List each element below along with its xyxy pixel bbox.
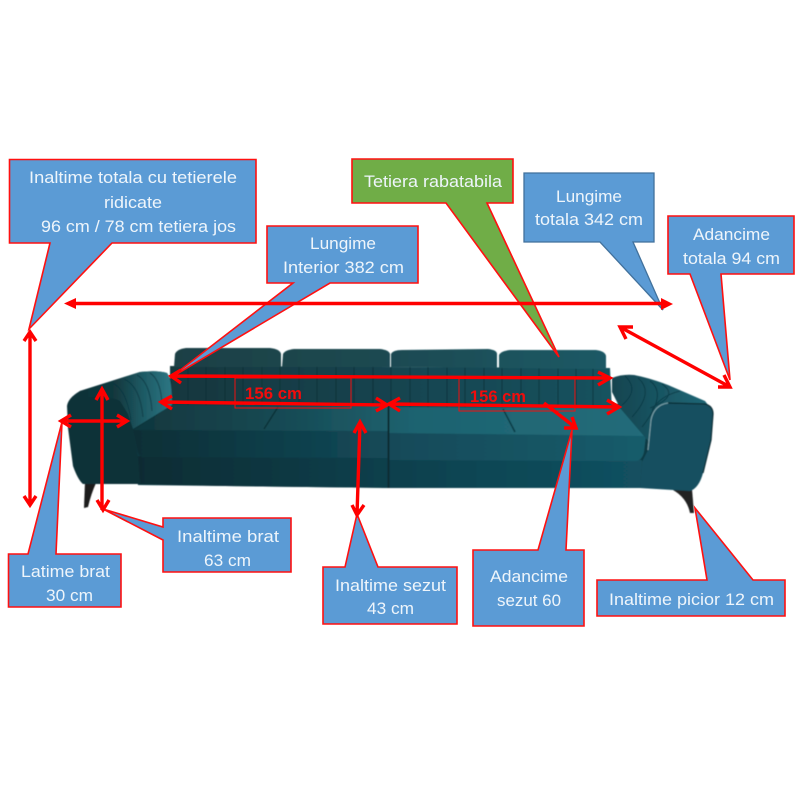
arrow: seat height <box>352 422 366 515</box>
right seat cushion <box>389 407 646 461</box>
callout: leg height <box>597 508 785 616</box>
size box: right 156 cm: 156 cm <box>470 387 526 406</box>
sofa underlay <box>130 404 655 488</box>
callout: total height <box>10 160 256 329</box>
size box: left 156 cm: 156 cm <box>245 384 302 403</box>
sofa illustration <box>67 348 713 513</box>
callout: foldable headrest <box>352 159 559 357</box>
callout: interior length: Lungime <box>310 234 376 253</box>
callout: arm width: Latime brat <box>21 562 110 581</box>
callout: total depth: totala 94 cm <box>683 249 780 268</box>
left arm <box>67 371 172 484</box>
size box: right 156 cm <box>459 378 575 411</box>
arrow: seat depth <box>544 403 576 428</box>
left leg <box>84 482 96 508</box>
callout: total length: totala 342 cm <box>535 210 643 229</box>
right arm ribs <box>612 375 712 442</box>
callout: total length: Lungime <box>556 187 622 206</box>
callout: seat height: 43 cm <box>367 599 414 618</box>
callout: seat depth: Adancime <box>490 567 568 586</box>
callout: seat height <box>323 514 457 624</box>
callout: interior length <box>170 226 418 378</box>
callout: seat height: Inaltime sezut <box>335 576 446 595</box>
callout: arm width <box>8 422 121 607</box>
arrow: right seat width <box>389 398 619 414</box>
callout: total height: 96 cm / 78 cm tetiera jos <box>41 217 236 236</box>
arrow: interior length <box>171 370 610 385</box>
callout: seat depth <box>473 430 584 626</box>
left arm ribs <box>72 371 172 429</box>
left seat cushion <box>133 405 388 458</box>
right arm <box>640 403 713 491</box>
headrests <box>174 348 606 369</box>
center seam <box>388 406 390 488</box>
callout: leg height: Inaltime picior 12 cm <box>609 590 774 609</box>
arrow: total height <box>24 332 36 505</box>
callout: interior length: Interior 382 cm <box>283 258 404 277</box>
callout: total height: ridicate <box>104 193 162 212</box>
callout: arm height <box>103 509 291 572</box>
sofa base <box>137 456 642 488</box>
arrow: total length <box>64 298 673 310</box>
back cushions <box>170 366 612 412</box>
callout: seat depth: sezut 60 <box>497 591 561 610</box>
arrow: arm height <box>96 389 109 510</box>
callout: foldable headrest: Tetiera rabatabila <box>364 172 503 191</box>
callout: total depth <box>668 216 794 380</box>
callout: arm height: Inaltime brat <box>177 527 279 546</box>
callout: total length <box>524 173 663 310</box>
size box: left 156 cm <box>235 378 351 408</box>
arrow: total depth <box>620 327 730 387</box>
arrow: arm width <box>61 415 127 427</box>
callout: arm width: 30 cm <box>46 586 93 605</box>
arrow: left seat width <box>161 396 387 411</box>
callout: arm height: 63 cm <box>204 551 251 570</box>
callout: total depth: Adancime <box>693 225 770 244</box>
right leg <box>673 487 694 513</box>
callout: total height: Inaltime totala cu tetierele <box>29 168 237 187</box>
